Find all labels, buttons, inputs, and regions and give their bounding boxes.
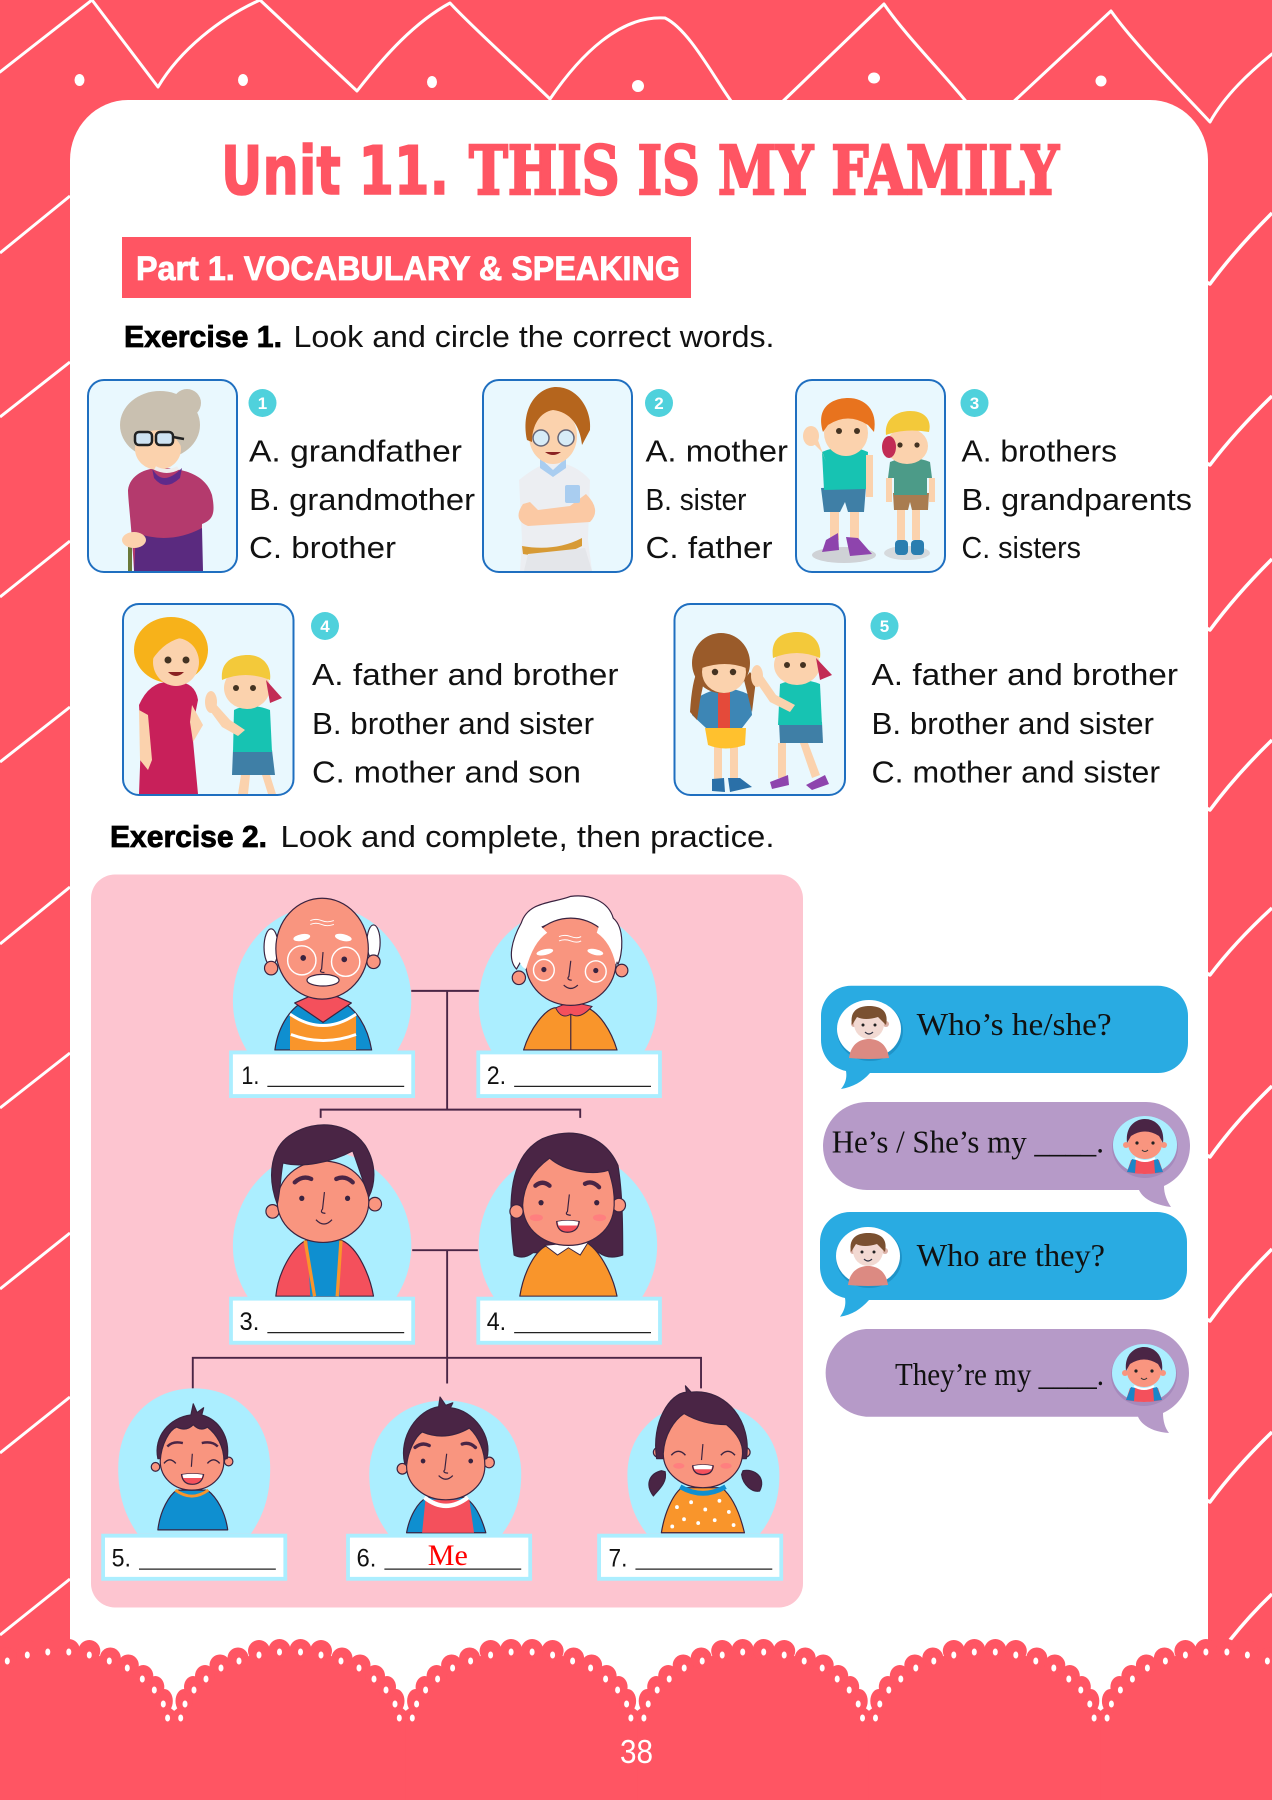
options 3: C. sisters	[962, 530, 1081, 565]
title	[221, 131, 1060, 210]
badge 5: 5	[880, 617, 889, 636]
label box 6: Me	[428, 1540, 468, 1572]
section banner: Part 1: Part 1. VOCABULARY & SPEAKING	[136, 250, 680, 288]
badge 2: 2	[654, 394, 664, 413]
options 4: C. mother and son	[312, 754, 581, 790]
speech bubble 3	[820, 1212, 1187, 1317]
card 5: brother and sister	[674, 604, 845, 795]
options 2: A. mother	[646, 434, 788, 468]
label box 2	[478, 1052, 660, 1096]
options 3: A. brothers	[962, 434, 1117, 468]
options 3: B. grandparents	[962, 482, 1192, 517]
options 2	[646, 434, 788, 565]
tree connector lines	[193, 991, 701, 1388]
options 4: B. brother and sister	[312, 706, 594, 741]
badge 1	[248, 389, 276, 417]
top zigzag decoration	[0, 0, 1272, 122]
panel: family tree	[91, 874, 803, 1608]
badge 3	[960, 389, 988, 417]
speech bubble 4	[826, 1329, 1189, 1433]
top dots	[74, 72, 1106, 92]
person 2: grandmother	[479, 896, 657, 1056]
avatar: boy	[836, 1227, 902, 1288]
title: Unit 11.	[221, 132, 449, 210]
badge 1: 1	[258, 394, 267, 413]
person 6: me	[369, 1397, 521, 1534]
badge 4: 4	[320, 617, 330, 636]
section banner: Part 1	[122, 237, 691, 298]
label box 3	[231, 1299, 413, 1343]
exercise 2 heading: Look and complete, then practice.	[280, 819, 774, 854]
label box 1: 1.	[241, 1062, 259, 1090]
options 1	[249, 434, 475, 565]
label box 3: 3.	[240, 1308, 259, 1336]
badge 2	[645, 389, 673, 417]
options 1: A. grandfather	[249, 434, 462, 468]
speech bubble 1	[821, 986, 1188, 1089]
right side stripes	[1206, 213, 1272, 1640]
bubble text: They’re my ____.	[895, 1356, 1104, 1392]
options 4: A. father and brother	[312, 657, 618, 692]
label box 5: 5.	[112, 1544, 131, 1573]
options 5: A. father and brother	[872, 657, 1178, 692]
card 3: two brothers	[796, 380, 945, 572]
exercise 2 heading: Exercise 2.	[110, 819, 267, 854]
page number: 38	[620, 1733, 653, 1770]
exercise 1 heading: Look and circle the correct words.	[294, 319, 774, 354]
options 1: C. brother	[249, 530, 396, 565]
label box 2: 2.	[487, 1062, 506, 1090]
person 4: mother	[479, 1133, 657, 1299]
bottom scalloped border	[0, 1639, 1272, 1800]
avatar: child	[1111, 1344, 1177, 1406]
person 7: sister	[627, 1386, 779, 1534]
options 2: C. father	[646, 530, 772, 565]
person 5: brother	[118, 1388, 270, 1534]
card 1: grandmother	[88, 380, 237, 572]
options 4	[312, 657, 618, 790]
label box 7: 7.	[609, 1544, 627, 1573]
options 5: C. mother and sister	[872, 754, 1160, 790]
options 3	[962, 434, 1192, 565]
label box 4: 4.	[487, 1308, 506, 1336]
options 5: B. brother and sister	[872, 706, 1154, 741]
card 4: mother and son	[123, 604, 294, 795]
exercise 1 heading: Exercise 1.	[124, 319, 282, 354]
speech bubble 2	[823, 1102, 1190, 1207]
avatar: boy	[837, 1000, 903, 1061]
options 2: B. sister	[646, 482, 746, 517]
bubble text: Who’s he/she?	[917, 1006, 1112, 1042]
label box 4	[478, 1299, 660, 1343]
badge 5	[870, 612, 898, 640]
person 1: grandfather	[233, 898, 411, 1054]
label box 1	[231, 1052, 413, 1096]
badge 3: 3	[970, 394, 979, 413]
options 5	[872, 657, 1178, 790]
options 1: B. grandmother	[249, 482, 475, 517]
label box 7	[599, 1536, 781, 1579]
bubble text: Who are they?	[917, 1237, 1105, 1273]
label box 6: 6.	[357, 1544, 376, 1573]
bubble text: He’s / She’s my ____.	[832, 1124, 1104, 1160]
person 3: father	[233, 1125, 411, 1299]
avatar: child	[1112, 1116, 1178, 1178]
label box 5	[103, 1536, 285, 1579]
card 2: father	[483, 380, 632, 572]
title: THIS IS MY FAMILY	[469, 131, 1060, 210]
label box 6	[348, 1536, 530, 1579]
badge 4	[311, 612, 339, 640]
left side stripes	[0, 196, 70, 1635]
